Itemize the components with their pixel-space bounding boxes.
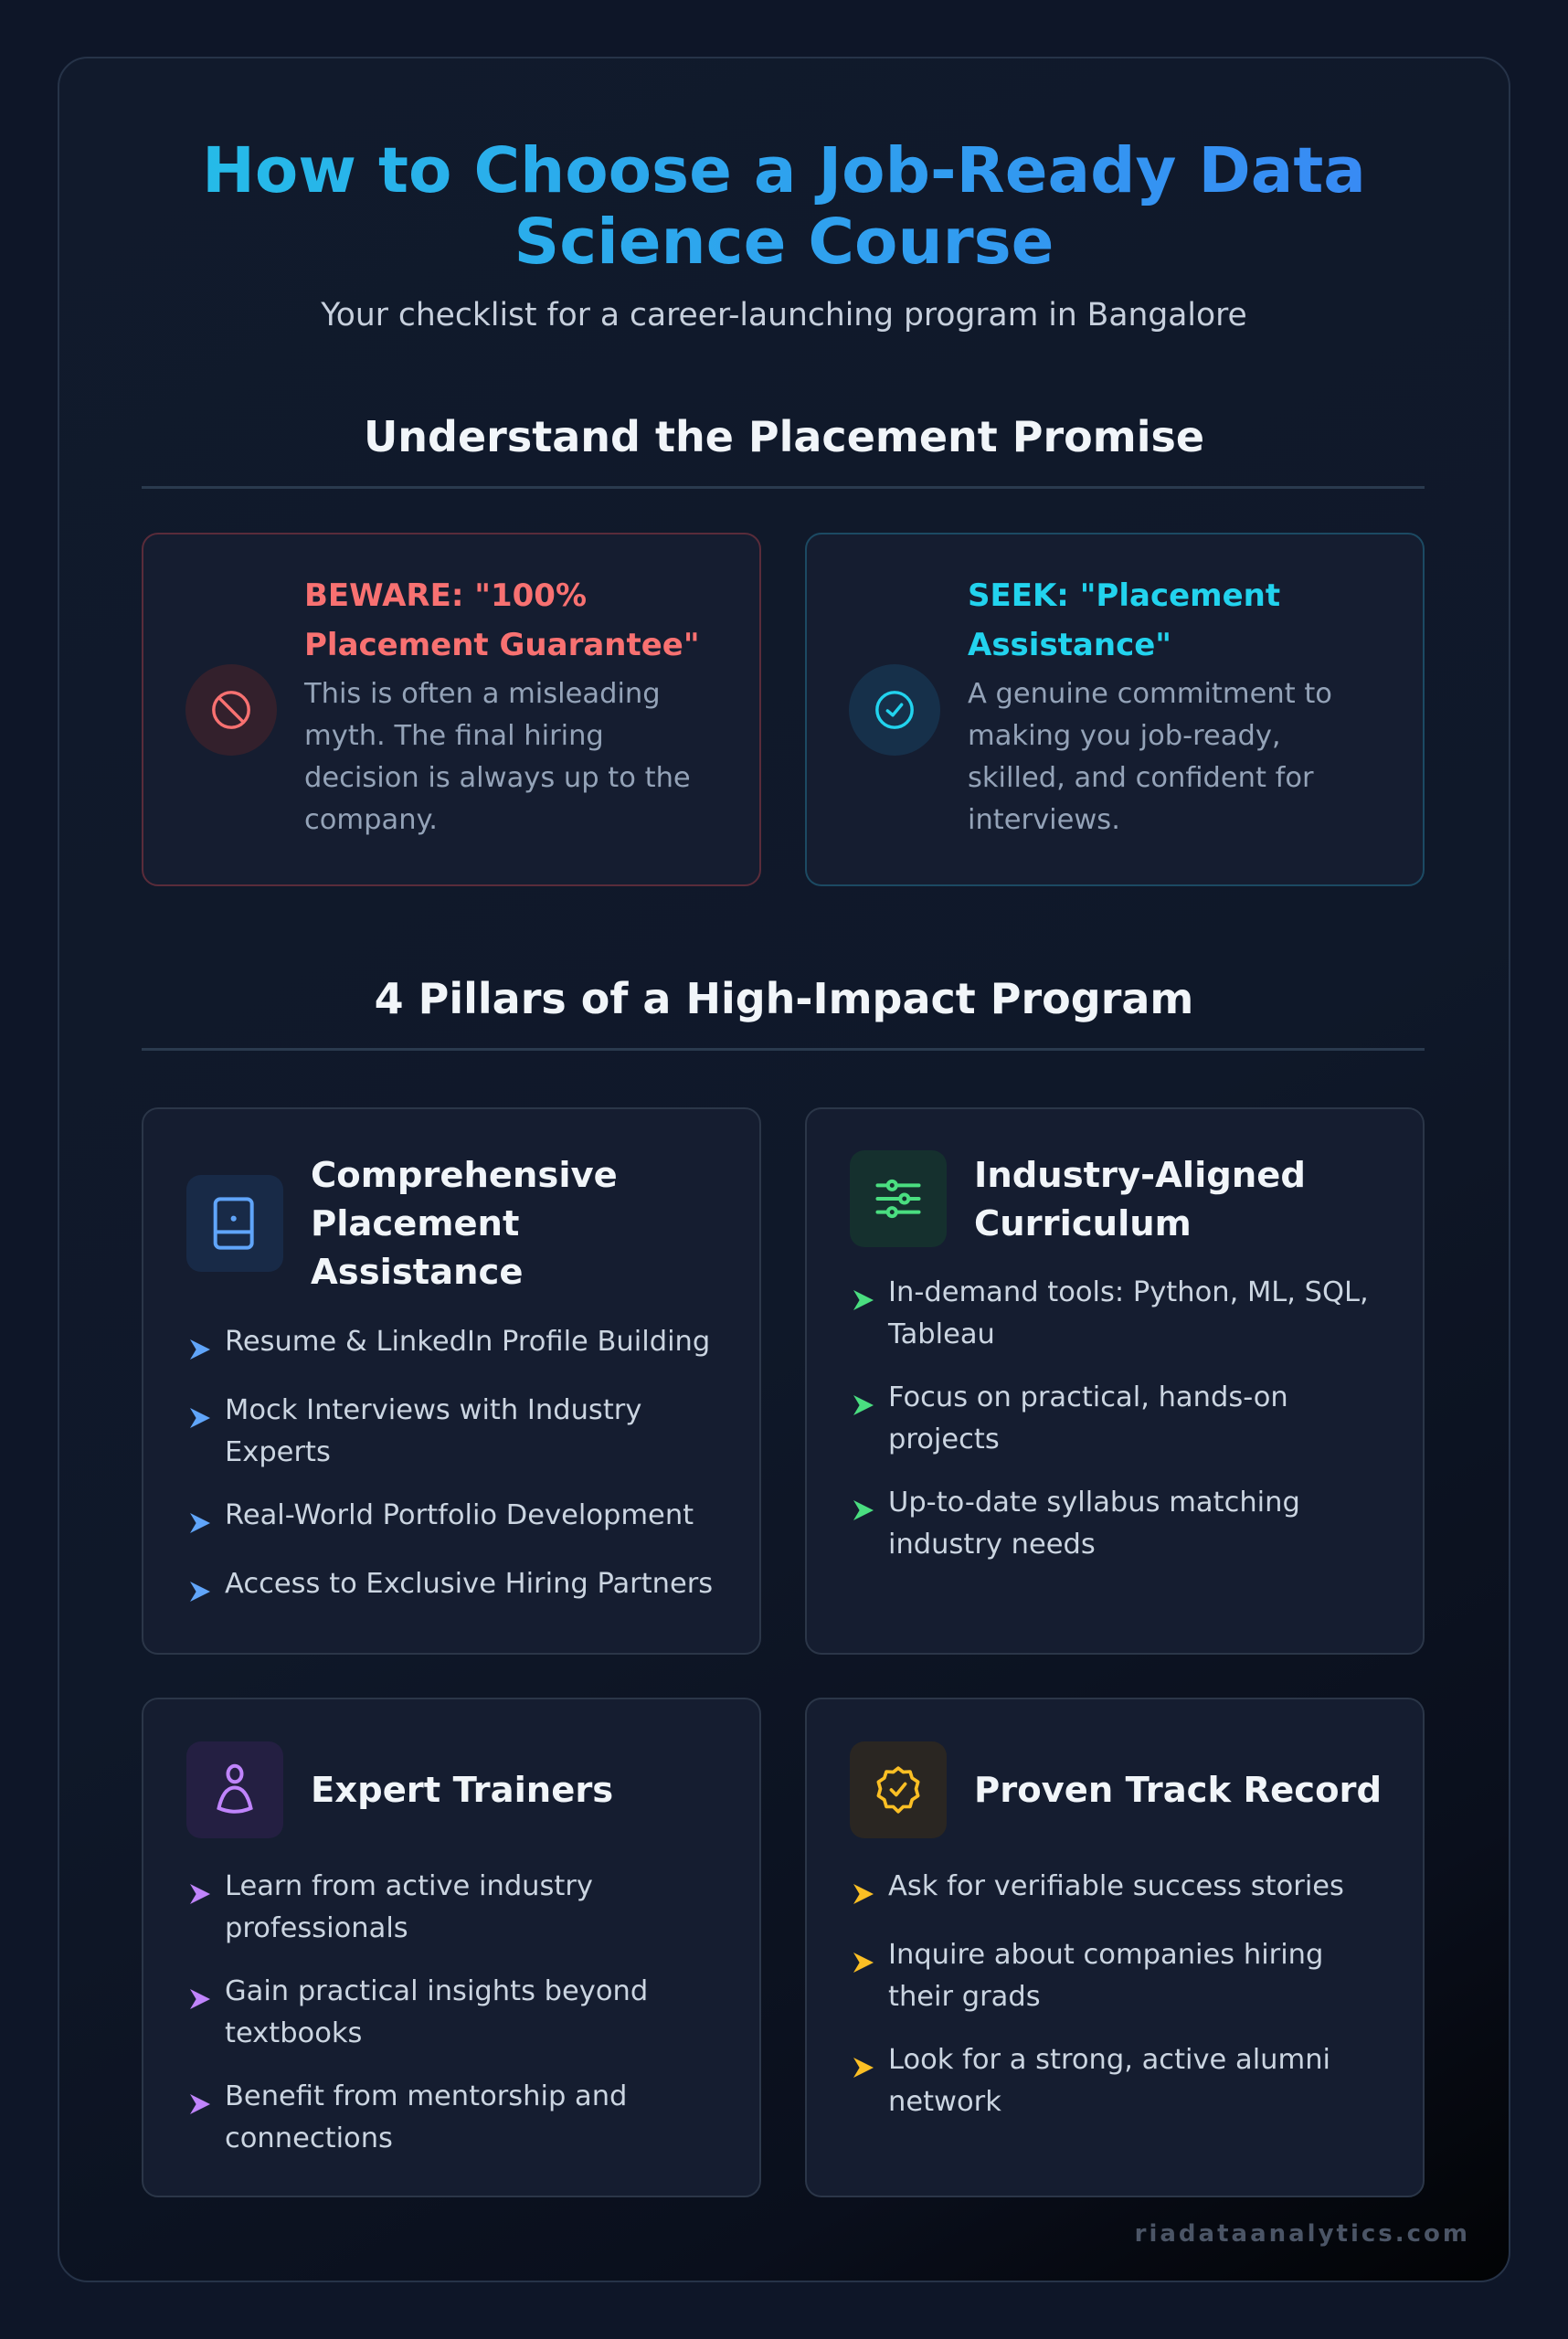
bullet list xyxy=(190,1870,648,2154)
card title xyxy=(974,1155,1306,1244)
text: beware: company. xyxy=(304,804,438,836)
bullet list: Ask for verifiable success stories xyxy=(888,1870,1344,1902)
card title: Curriculum xyxy=(974,1203,1192,1244)
bullet list: their grads xyxy=(888,1981,1041,2013)
bullet list xyxy=(853,1870,1344,2118)
text: seek: making you job-ready, xyxy=(968,720,1281,752)
bullet list: projects xyxy=(888,1424,1000,1455)
bullet list: Benefit from mentorship and xyxy=(225,2080,627,2112)
heading: pillars: 4 Pillars of a High-Impact Program xyxy=(375,974,1193,1023)
text: beware xyxy=(303,577,700,836)
bullet list xyxy=(190,1326,713,1602)
bullet list: Real-World Portfolio Development xyxy=(225,1499,694,1531)
panel: track record xyxy=(805,1698,1425,2197)
card title: Proven Track Record xyxy=(974,1770,1382,1811)
panel: placement assistance xyxy=(142,1107,761,1655)
subtitle: Your checklist for a career-launching program in Bangalore xyxy=(321,297,1247,333)
card title: Industry-Aligned xyxy=(974,1155,1306,1196)
bullet list: In-demand tools: Python, ML, SQL, xyxy=(888,1276,1369,1308)
bullet list xyxy=(853,1276,1369,1561)
text: beware: BEWARE: "100% xyxy=(304,577,587,614)
bullet list: Mock Interviews with Industry xyxy=(225,1394,641,1426)
text: beware: Placement Guarantee" xyxy=(304,627,700,663)
text: seek: Assistance" xyxy=(968,627,1171,663)
text: beware: decision is always up to the xyxy=(304,762,691,794)
icon: ban xyxy=(185,664,277,756)
text: beware: This is often a misleading xyxy=(304,678,661,710)
icon: badge check xyxy=(850,1741,947,1838)
text: seek: skilled, and confident for xyxy=(968,762,1314,794)
bullet list: industry needs xyxy=(888,1529,1096,1561)
panel: beware xyxy=(142,533,761,886)
text: seek: SEEK: "Placement xyxy=(968,577,1280,614)
card title xyxy=(311,1155,618,1293)
icon: user xyxy=(186,1741,283,1838)
text: beware: myth. The final hiring xyxy=(304,720,604,752)
bullet list: Experts xyxy=(225,1436,331,1468)
bullet list: Focus on practical, hands-on xyxy=(888,1381,1288,1413)
bullet list: Inquire about companies hiring xyxy=(888,1939,1323,1971)
panel: curriculum xyxy=(805,1107,1425,1655)
heading: placement promise: Understand the Placement Promise xyxy=(364,412,1204,461)
card title: Expert Trainers xyxy=(311,1770,613,1811)
bullet list: Learn from active industry xyxy=(225,1870,593,1902)
text: seek: interviews. xyxy=(968,804,1120,836)
bullet list: Resume & LinkedIn Profile Building xyxy=(225,1326,710,1358)
bullet list: Tableau xyxy=(888,1318,995,1350)
bullet list: Look for a strong, active alumni xyxy=(888,2044,1330,2076)
icon: tablet xyxy=(186,1175,283,1272)
footer: website: riadataanalytics.com xyxy=(1135,2220,1470,2248)
card title: Placement xyxy=(311,1203,519,1244)
text: seek: A genuine commitment to xyxy=(968,678,1332,710)
icon: sliders xyxy=(850,1150,947,1247)
title: How to Choose a Job-Ready Data xyxy=(202,134,1366,207)
icon: check circle xyxy=(849,664,940,756)
title: Science Course xyxy=(514,206,1054,279)
bullet list: professionals xyxy=(225,1912,408,1944)
bullet list: Gain practical insights beyond xyxy=(225,1975,648,2007)
bullet list: network xyxy=(888,2086,1001,2118)
title xyxy=(0,135,1568,278)
bullet list: Up-to-date syllabus matching xyxy=(888,1487,1300,1519)
bullet list: connections xyxy=(225,2122,393,2154)
bullet list: textbooks xyxy=(225,2017,362,2049)
text: seek xyxy=(968,577,1332,836)
panel: trainers xyxy=(142,1698,761,2197)
panel: seek xyxy=(805,533,1425,886)
card title: Assistance xyxy=(311,1252,523,1293)
bullet list: Access to Exclusive Hiring Partners xyxy=(225,1568,713,1600)
card title: Comprehensive xyxy=(311,1155,618,1196)
